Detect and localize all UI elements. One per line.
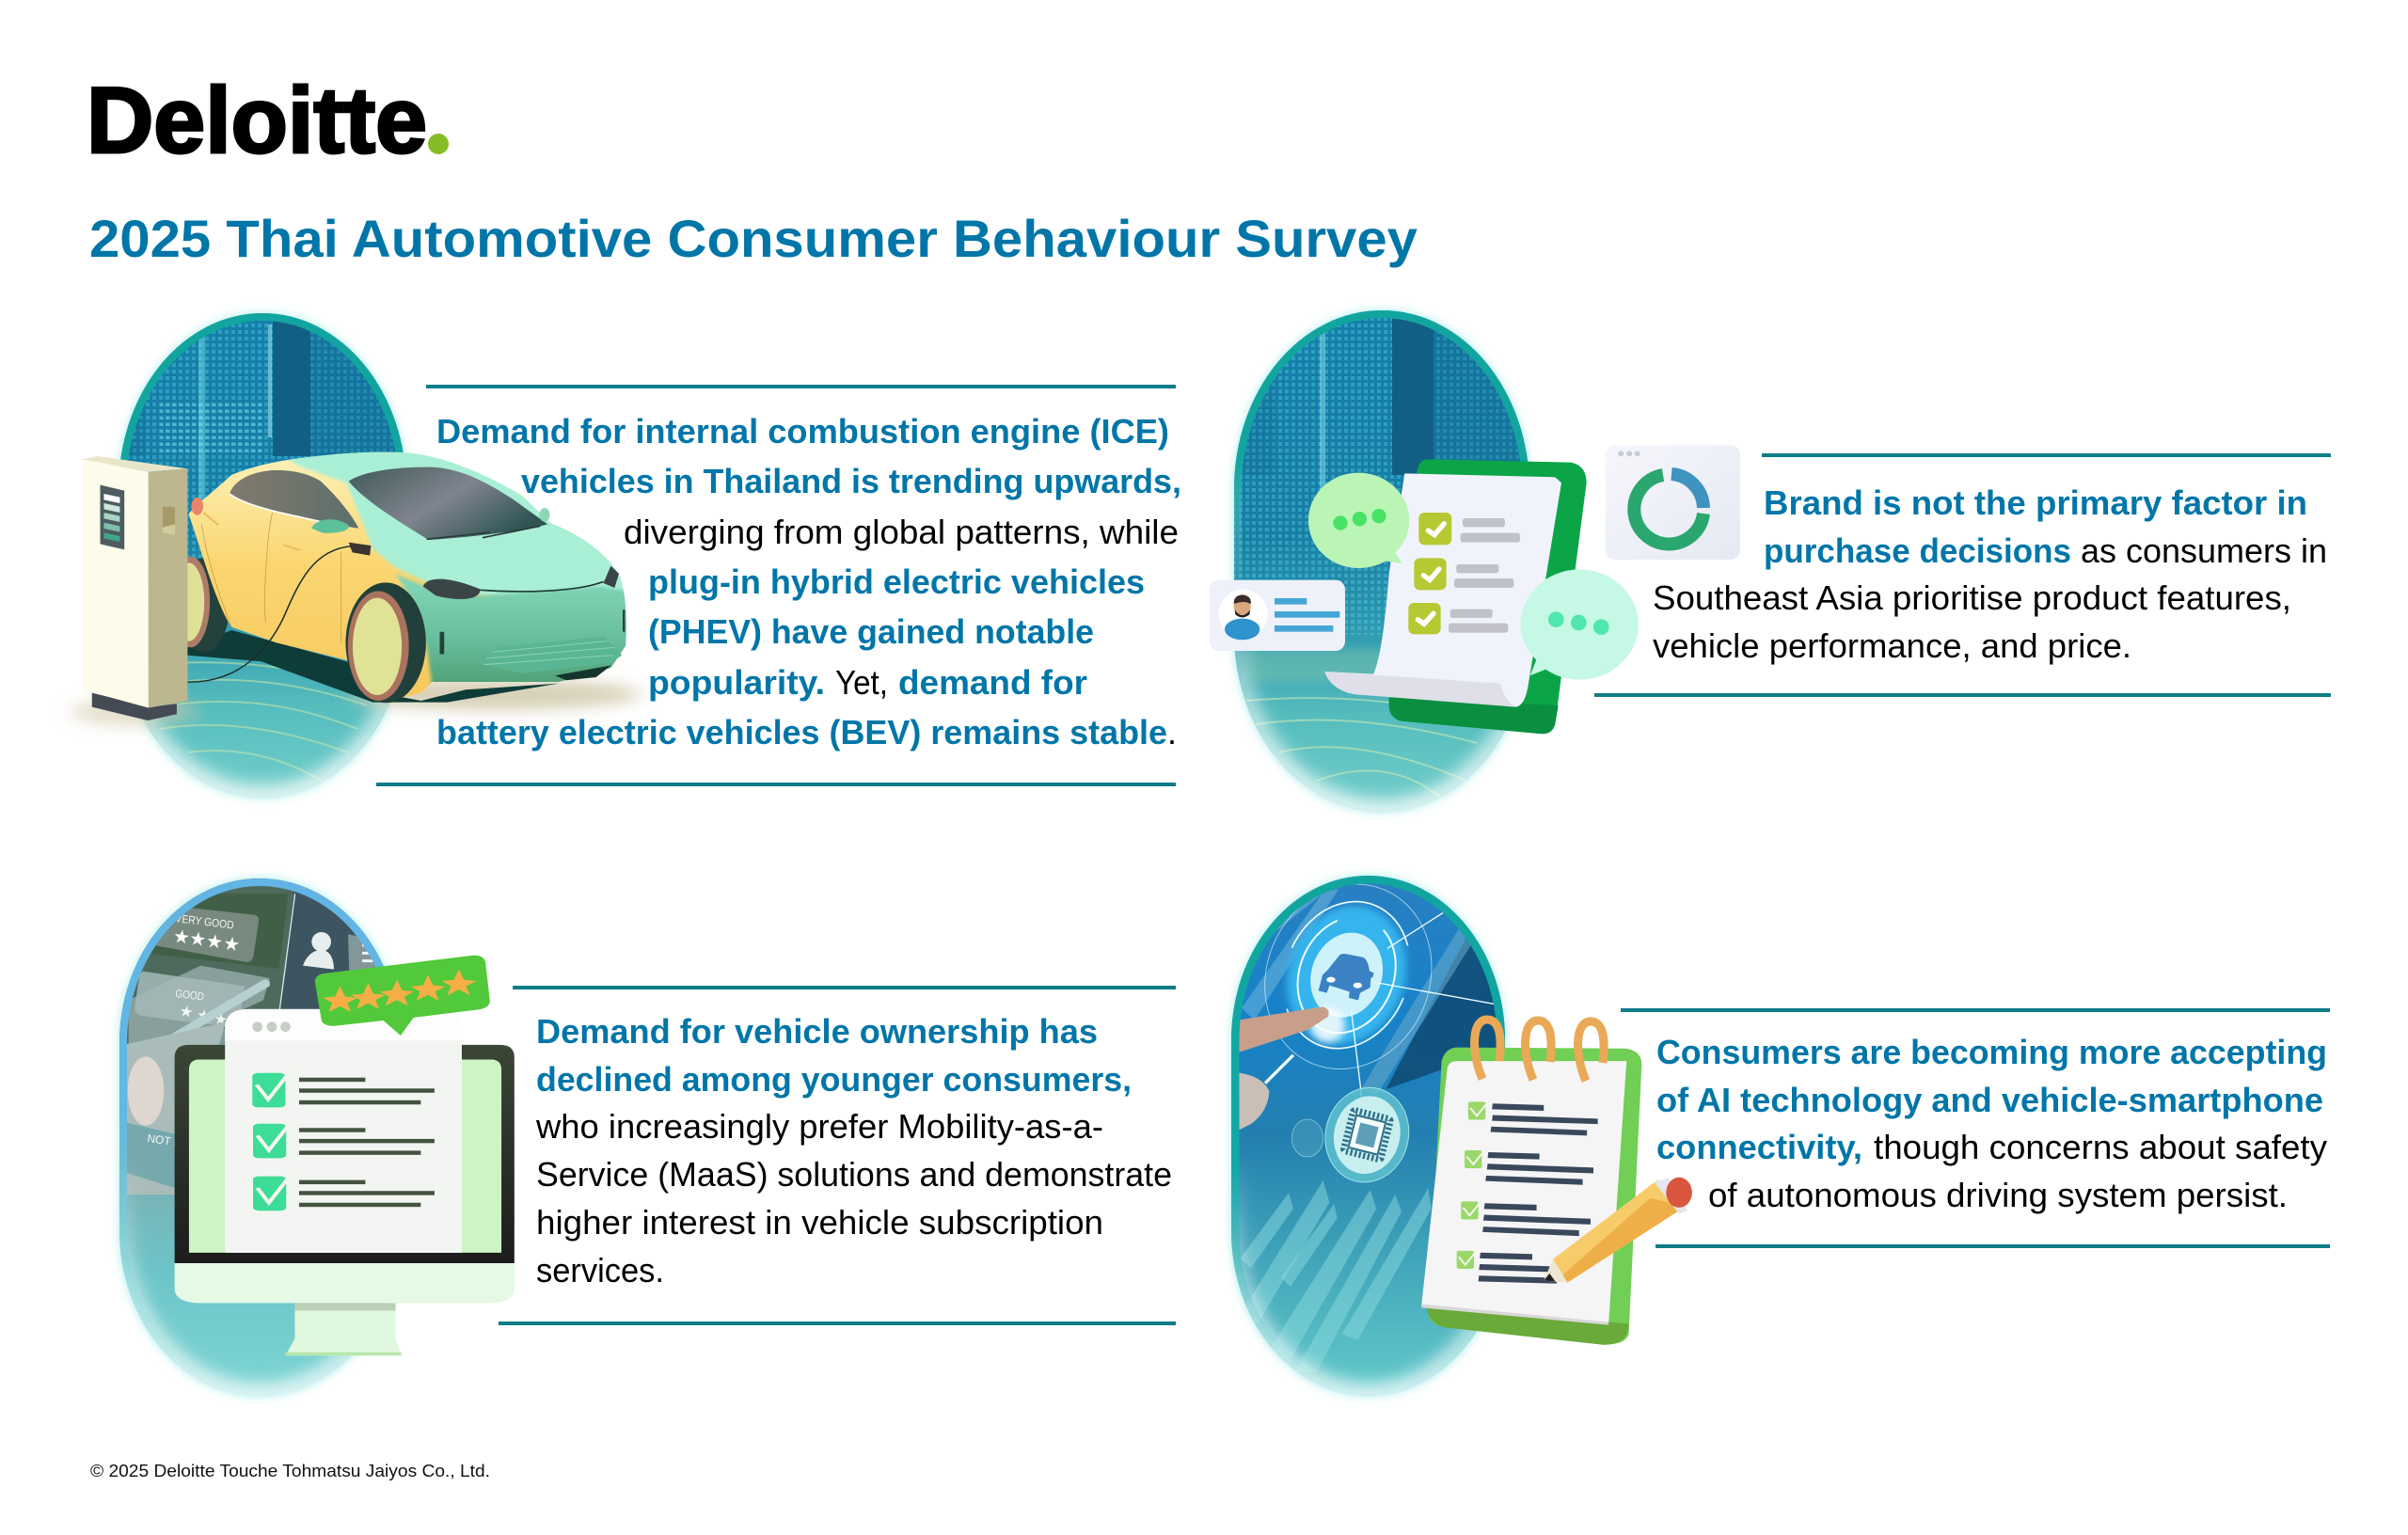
side window [230, 470, 358, 529]
bottom rule [1594, 693, 2331, 697]
top rule [513, 986, 1176, 989]
finger [1235, 1006, 1329, 1053]
text block [1656, 1033, 2327, 1214]
dark right band [1386, 924, 1505, 1089]
monitor [175, 1045, 515, 1263]
front wheel [345, 582, 426, 703]
illustration: checklist notepad and car tech [1228, 859, 1692, 1401]
text block [1653, 483, 2327, 665]
person icon [303, 932, 334, 970]
bottom rule [1656, 1244, 2330, 1248]
text block [535, 1012, 1172, 1290]
text block: Demand for vehicle ownership has [536, 1012, 1098, 1051]
panel: vehicle ownership among younger consumers [113, 875, 1176, 1401]
illustration: rating on computer: GOOD [175, 987, 205, 1004]
dark top backdrop [119, 878, 293, 1044]
list rows [1479, 1103, 1598, 1284]
car shadow [351, 679, 641, 710]
hologram glow [1283, 903, 1409, 1048]
text block: though concerns about safety [1874, 1128, 2327, 1166]
text block: connectivity, [1656, 1128, 1862, 1166]
text block: Yet, [835, 663, 888, 702]
fingertip flare [1310, 1008, 1345, 1042]
text block: vehicle performance, and price. [1653, 626, 2131, 665]
rating badge [315, 956, 490, 1036]
speech bubble mint [1521, 569, 1639, 680]
check items [1418, 513, 1451, 545]
text block: vehicles in Thailand is trending upwards, [521, 462, 1181, 500]
panel: ICE PHEV BEV demand [71, 310, 1181, 804]
good chip [135, 972, 245, 1028]
lower grey [127, 1022, 226, 1195]
car body [183, 449, 633, 705]
small fingerprint ring [1291, 1119, 1323, 1157]
charger station [92, 693, 177, 720]
chip circle [1324, 1087, 1409, 1183]
charging connector [349, 543, 371, 556]
mirror [311, 519, 349, 533]
text block: Brand is not the primary factor in [1764, 483, 2307, 522]
profile card [1210, 580, 1345, 651]
check rows [252, 1073, 285, 1107]
illustration: survey checklist [1210, 306, 1740, 818]
car icon [1319, 954, 1374, 1000]
donut chart [1634, 474, 1703, 544]
pencil [1544, 1179, 1685, 1282]
top rule [426, 385, 1176, 388]
top rule [1762, 453, 2331, 457]
charging cable [187, 546, 353, 682]
grille [479, 637, 622, 673]
binder rings [1475, 1020, 1604, 1081]
text block: popularity. [648, 663, 825, 702]
text block: of AI technology and vehicle-smartphone [1656, 1081, 2323, 1119]
headlights [423, 579, 481, 599]
text block: Service (MaaS) solutions and demonstrate [536, 1155, 1172, 1194]
tail light [191, 498, 203, 515]
charger shadow [71, 698, 198, 726]
panel: AI and connectivity [1228, 859, 2330, 1401]
check boxes [1457, 1101, 1485, 1269]
phone edge [171, 979, 270, 1035]
text block: purchase decisions [1764, 531, 2071, 570]
illustration: rating on computer: VERY GOOD [175, 911, 235, 932]
illustration: rating on computer: ★ [213, 1009, 230, 1029]
text block: higher interest in vehicle subscription [536, 1203, 1103, 1242]
paper form [225, 1009, 462, 1253]
fingertip [128, 1056, 164, 1126]
text block: who increasingly prefer Mobility-as-a- [535, 1107, 1103, 1146]
panel: brand not primary factor [1210, 306, 2331, 818]
illustration: rating on computer: ★ [178, 1002, 195, 1021]
illustration: rating on computer [113, 875, 515, 1401]
text block: Consumers are becoming more accepting [1656, 1033, 2327, 1071]
bottom rule [376, 783, 1176, 786]
paper [1324, 473, 1561, 707]
illustration: rating on computer: ★ [205, 931, 224, 954]
notepad back [1429, 1048, 1641, 1345]
top rule [1621, 1008, 2330, 1012]
title: 2025 Thai Automotive Consumer Behaviour Survey [89, 209, 1418, 268]
text block: demand for [898, 663, 1087, 702]
text block: services. [536, 1251, 664, 1290]
data spikes [1240, 1180, 1432, 1371]
speech bubble green [1308, 473, 1409, 568]
bottom rule [499, 1321, 1176, 1325]
text block: (PHEV) have gained notable [648, 612, 1094, 651]
text block: Demand for internal combustion engine (ICE) [436, 412, 1169, 451]
text block: Southeast Asia prioritise product features, [1653, 578, 2291, 617]
corner highlights [1275, 894, 1323, 932]
not chip [127, 1123, 175, 1188]
text block: declined among younger consumers, [536, 1060, 1132, 1099]
illustration: electric car charging [71, 310, 641, 804]
divider [279, 894, 295, 1009]
green phone [1389, 459, 1587, 734]
text block: . [1167, 713, 1177, 752]
text block: plug-in hybrid electric vehicles [648, 562, 1145, 601]
text block: diverging from global patterns, while [624, 513, 1179, 551]
illustration: rating on computer: NOT E [147, 1131, 182, 1149]
footer copyright: © 2025 Deloitte Touche Tohmatsu Jaiyos Co., Ltd. [90, 1462, 490, 1480]
phone surface [128, 965, 270, 1044]
Deloitte logo: Deloitte [87, 68, 427, 172]
right dark panel [278, 884, 384, 1009]
rear wheel [178, 558, 230, 652]
illustration: rating on computer: ★ [188, 928, 208, 951]
text block: as consumers in [2081, 531, 2327, 570]
notepad paper [1421, 1061, 1626, 1324]
text block: of autonomous driving system persist. [1708, 1176, 2288, 1214]
text block [436, 412, 1181, 752]
very good chip [149, 906, 259, 962]
illustration: rating on computer: ★ [196, 1005, 212, 1025]
chart window frame [1606, 445, 1740, 560]
illustration: rating on computer: ★ [172, 926, 191, 949]
illustration: rating on computer: ★ [222, 933, 242, 956]
windshield [349, 467, 547, 540]
text block: battery electric vehicles (BEV) remains stable [436, 713, 1167, 752]
ground shade below car [187, 630, 559, 703]
